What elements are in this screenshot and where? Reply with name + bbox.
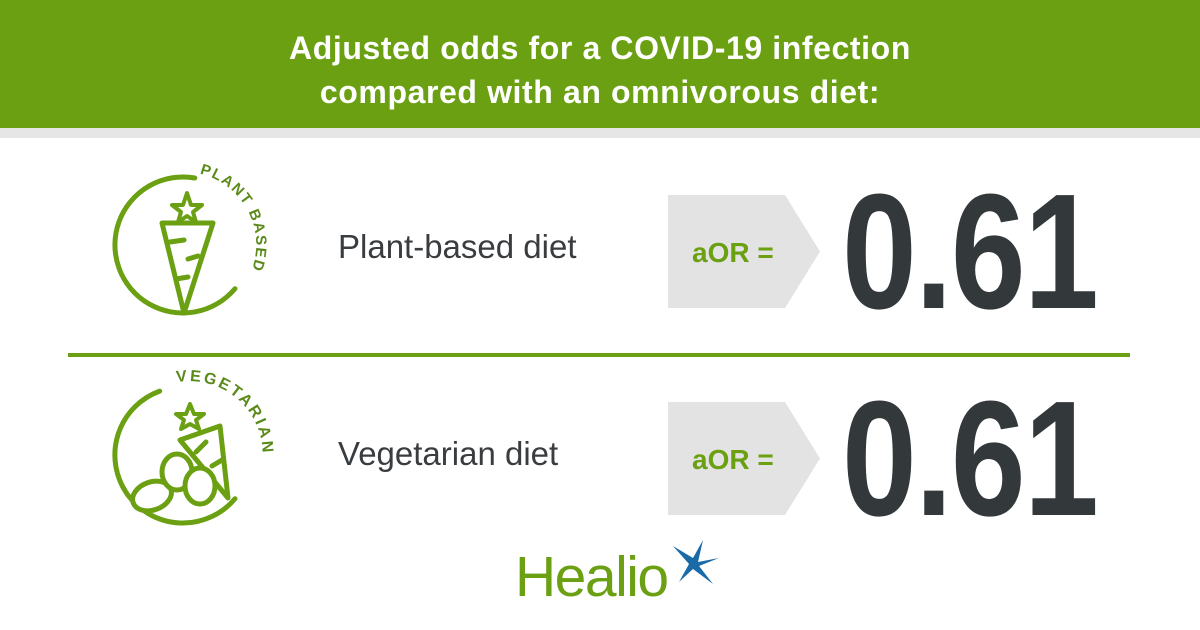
icon: plant based carrot: PLANT BASED [200,164,267,270]
header banner: compared with an omnivorous diet: [320,74,880,110]
divider [68,353,1130,357]
header banner: Adjusted odds for a COVID-19 infection [289,30,911,66]
arrow badge 2 [668,402,820,515]
arrow badge 1: aOR = [692,237,774,268]
logo: Healio: Healio [515,545,668,609]
label: vegetarian diet: Vegetarian diet [338,435,558,472]
logo: Healio [515,540,719,609]
label: plant-based diet: Plant-based diet [338,228,576,265]
arrow badge 2: aOR = [692,444,774,475]
icon: plant based carrot [112,164,267,316]
header banner [0,0,1200,128]
value 1: 0.61 [842,160,1097,343]
value 2: 0.61 [842,367,1097,550]
arrow badge 1 [668,195,820,308]
icon: vegetarian carrot and eggs: VEGETARIAN [176,370,274,452]
icon: vegetarian carrot and eggs [112,370,274,526]
